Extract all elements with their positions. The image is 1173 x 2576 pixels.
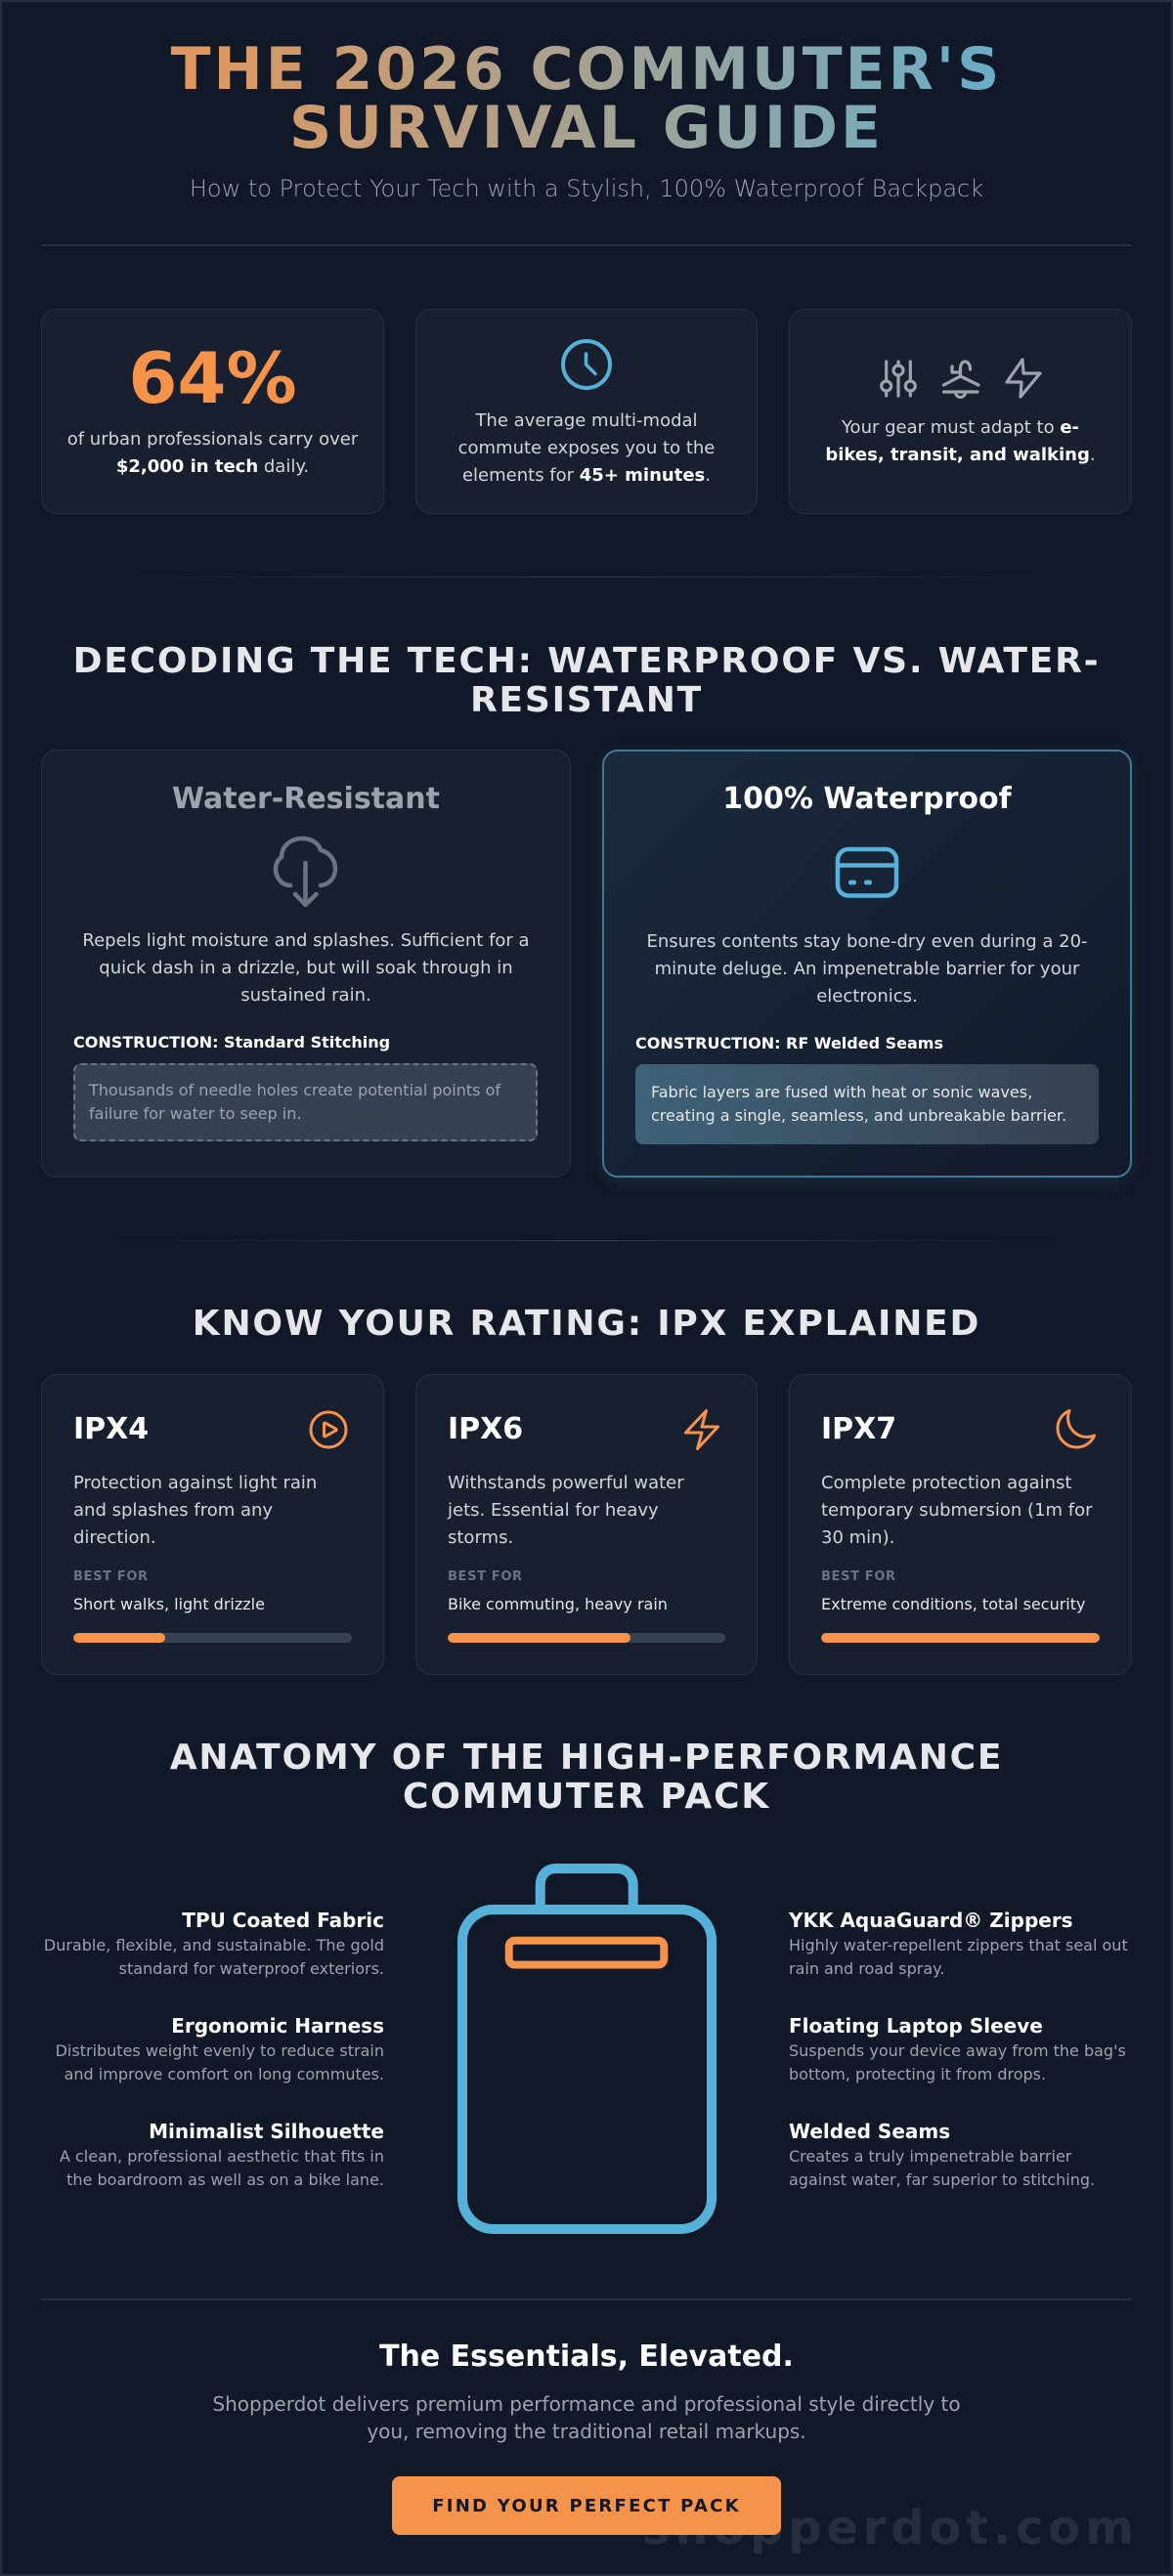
icon: cloud download [274,837,338,907]
construction note [635,1064,1099,1144]
closing paragraph: you, removing the traditional retail markups. [367,2420,806,2443]
feature: floating laptop sleeve: Floating Laptop Sleeve [789,2014,1043,2038]
feature: floating laptop sleeve: Suspends your device away from the bag's [789,2041,1126,2060]
construction label: CONSTRUCTION: RF Welded Seams [635,1034,943,1052]
rating name: IPX6 [448,1412,523,1446]
panel: IPX7 [789,1374,1132,1675]
section heading: decoding the tech [73,641,1100,720]
rating description [821,1473,1093,1548]
closing paragraph: Shopperdot delivers premium performance and professional style directly to [212,2392,961,2416]
panel: stat 64 percent [41,309,384,514]
section heading: anatomy [170,1738,1003,1817]
subtitle: How to Protect Your Tech with a Stylish, 100% Waterproof Backpack [190,175,983,202]
feature: YKK zippers: YKK AquaGuard® Zippers [789,1909,1073,1932]
description: quick dash in a drizzle, but will soak through in [99,958,513,978]
feature: TPU coated fabric: Durable, flexible, and sustainable. The gold [44,1936,384,1954]
stat text: commute exposes you to the [458,438,715,458]
feature: YKK zippers: Highly water-repellent zippers that seal out [789,1936,1128,1954]
construction note: failure for water to seep in. [89,1104,301,1123]
feature: YKK zippers: rain and road spray. [789,1959,944,1978]
feature: TPU coated fabric: standard for waterproof exteriors. [119,1959,384,1978]
card heading: 100% Waterproof [722,782,1012,816]
rating description: Complete protection against [821,1473,1071,1493]
stat text: elements for 45+ minutes. [462,465,711,486]
stat text: of urban professionals carry over [67,429,358,450]
description [646,931,1088,1007]
protection bar [448,1633,725,1643]
main title: SURVIVAL GUIDE [289,94,884,162]
feature: welded seams: against water, far superior to stitching. [789,2170,1095,2189]
best for label: BEST FOR [821,1569,896,1584]
section heading: anatomy: COMMUTER PACK [403,1777,770,1817]
rating description: and splashes from any [73,1500,273,1521]
stat text [458,410,715,486]
card heading: Water-Resistant [172,782,440,816]
rating description: storms. [448,1527,513,1548]
description [82,930,530,1006]
main title [41,40,1132,157]
best for value: Extreme conditions, total security [821,1595,1085,1613]
section heading: IPX ratings: KNOW YOUR RATING: IPX EXPLAINED [193,1304,980,1344]
icon: clock [561,339,612,390]
best for label: BEST FOR [448,1569,523,1584]
icon: waterproof pocket [835,846,899,898]
construction note: creating a single, seamless, and unbreakable barrier. [651,1106,1066,1125]
feature: welded seams [789,2120,1095,2189]
section heading: decoding the tech: RESISTANT [470,680,703,720]
feature: ergonomic harness: Ergonomic Harness [171,2014,384,2038]
best for value: Short walks, light drizzle [73,1595,265,1613]
backpack body [462,1910,712,2229]
call-to-action button [392,2476,781,2535]
description: minute deluge. An impenetrable barrier for your [655,959,1079,979]
stat text: bikes, transit, and walking. [825,445,1096,465]
construction note [73,1063,538,1141]
description: sustained rain. [240,985,371,1006]
rating description: temporary submersion (1m for [821,1500,1093,1521]
feature: minimalist silhouette [60,2120,384,2189]
rating description: Withstands powerful water [448,1473,684,1493]
feature: welded seams: Welded Seams [789,2120,950,2143]
icon: bolt [684,1409,719,1450]
feature: minimalist silhouette: the boardroom as well as on a bike lane. [66,2170,384,2189]
icon: play circle [309,1411,348,1448]
feature: ergonomic harness: and improve comfort on long commutes. [65,2065,384,2083]
main title: THE 2026 COMMUTER'S [171,35,1002,104]
section heading: decoding the tech: DECODING THE TECH: WATERPROOF VS. WATER- [73,641,1100,681]
stat number: 64% [128,337,297,419]
rating name: IPX7 [821,1412,896,1446]
closing paragraph [212,2392,961,2443]
stat text [67,429,358,477]
rating name: IPX4 [73,1412,149,1446]
panel: water-resistant [41,750,571,1178]
feature: minimalist silhouette: Minimalist Silhouette [149,2120,384,2143]
icons: sliders, hanger, bolt [880,358,1042,399]
feature: ergonomic harness [56,2014,384,2083]
rating description: jets. Essential for heavy [448,1500,659,1521]
backpack pocket [509,1941,664,1964]
section heading: anatomy: ANATOMY OF THE HIGH-PERFORMANCE [170,1738,1003,1778]
description: Ensures contents stay bone-dry even during a 20- [646,931,1088,952]
rating description: direction. [73,1527,156,1548]
call-to-action button: FIND YOUR PERFECT PACK [432,2496,741,2516]
construction note: Fabric layers are fused with heat or sonic waves, [651,1083,1032,1101]
panel: IPX6 [415,1374,758,1675]
feature: ergonomic harness: Distributes weight evenly to reduce strain [56,2041,384,2060]
panel: stat commute time [415,309,758,514]
stat text: $2,000 in tech daily. [116,456,309,477]
protection bar [821,1633,1100,1643]
rating description [73,1473,317,1548]
protection bar [73,1633,352,1643]
construction label: CONSTRUCTION: Standard Stitching [73,1033,390,1052]
feature: YKK zippers [788,1909,1128,1978]
construction note: Thousands of needle holes create potential points of [89,1081,500,1099]
backpack diagram [457,1864,717,2234]
feature: welded seams: Creates a truly impenetrable barrier [789,2147,1071,2166]
stat text: The average multi-modal [475,410,698,431]
backpack handle [541,1868,633,1910]
watermark: shopperdot.com [642,2501,1139,2555]
feature: minimalist silhouette: A clean, professional aesthetic that fits in [60,2147,384,2166]
panel: stat modes [789,309,1132,514]
panel: IPX4 [41,1374,384,1675]
feature: TPU coated fabric: TPU Coated Fabric [182,1909,384,1932]
rating description: Protection against light rain [73,1473,317,1493]
icon: moon [1056,1409,1096,1448]
feature: TPU coated fabric [44,1909,384,1978]
best for value: Bike commuting, heavy rain [448,1595,668,1613]
stat text: Your gear must adapt to e- [842,417,1079,438]
feature: floating laptop sleeve [789,2014,1126,2083]
panel: 100% waterproof [602,750,1132,1178]
feature: floating laptop sleeve: bottom, protecting it from drops. [789,2065,1046,2083]
rating description [448,1473,684,1548]
closing heading: The Essentials, Elevated. [379,2340,794,2374]
description: electronics. [816,986,918,1007]
best for label: BEST FOR [73,1569,149,1584]
stat text [825,417,1096,465]
rating description: 30 min). [821,1527,894,1548]
description: Repels light moisture and splashes. Sufficient for a [82,930,530,951]
